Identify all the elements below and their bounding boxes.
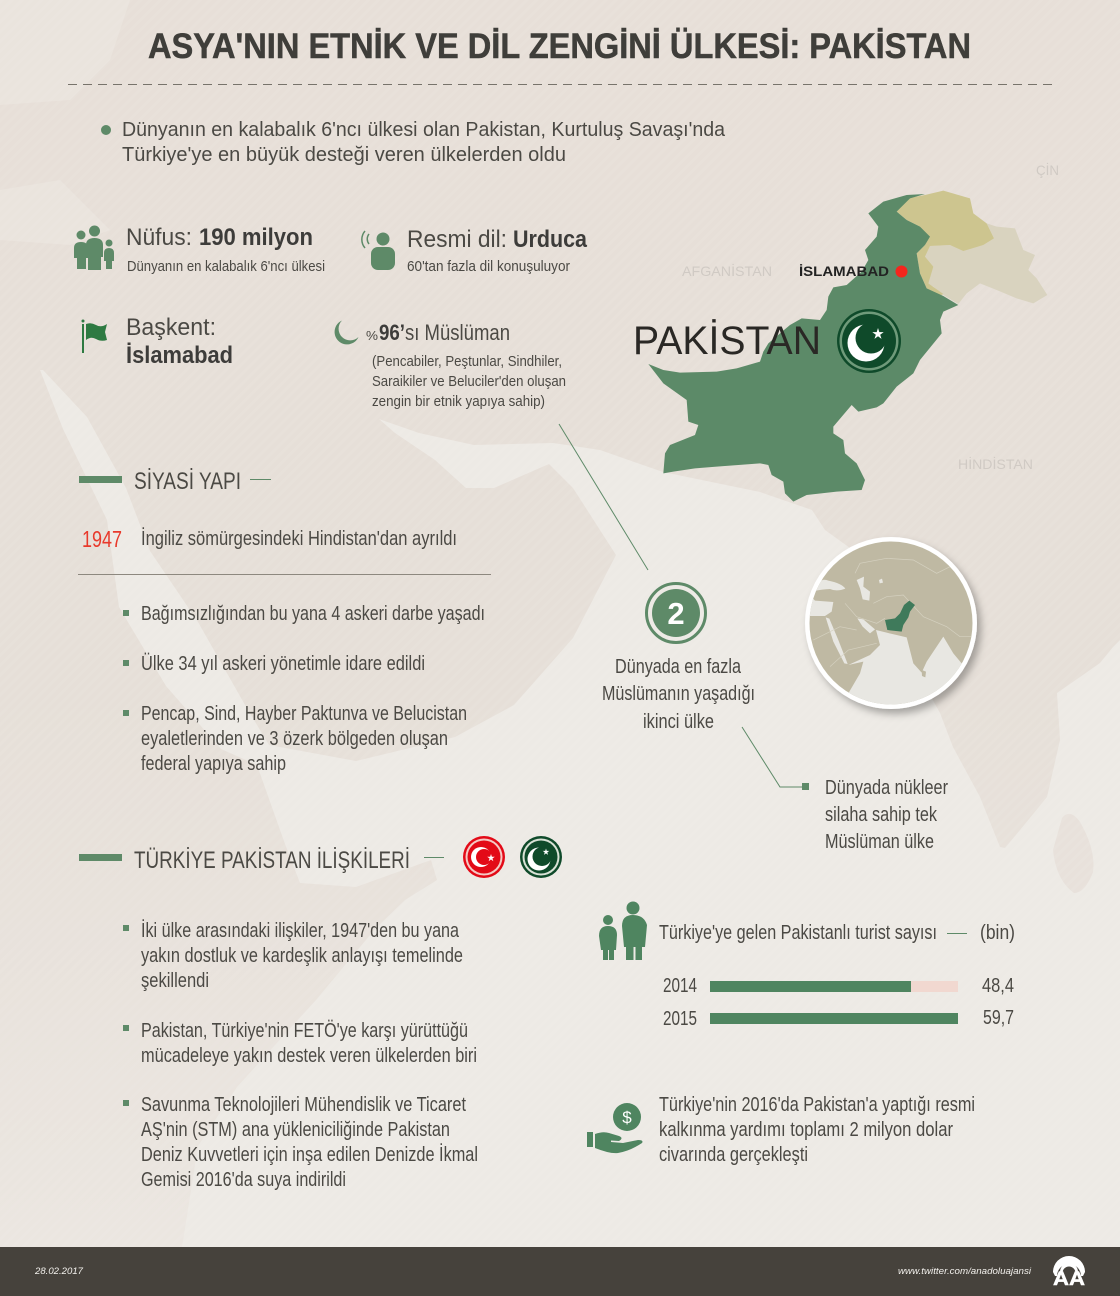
label: afganistan: AFGANİSTAN: [682, 262, 772, 279]
icon: turkish flag: [463, 836, 505, 878]
logo: anadolu agency: AA: [1053, 1269, 1085, 1290]
official language stat: 60'tan fazla dil konuşuluyor: [407, 258, 570, 275]
icon: aid hand and coin: $: [622, 1108, 632, 1127]
icon: pakistan flag badge: [837, 309, 901, 373]
title: ASYA'NIN ETNİK VE DİL ZENGİNİ ÜLKESİ: PAKİSTAN: [148, 27, 971, 66]
intro text: Dünyanın en kalabalık 6'ncı ülkesi olan Pakistan, Kurtuluş Savaşı'nda: [122, 119, 726, 141]
intro text: [101, 119, 726, 166]
badge: rank 2: 2: [667, 596, 685, 631]
arrow: connector to nuclear note: [742, 727, 809, 790]
heading: siyasi yapi: SİYASİ YAPI: [134, 468, 241, 495]
text: second largest muslim population: ikinci ülke: [643, 711, 714, 733]
text: nuclear power note: Dünyada nükleer: [825, 777, 948, 799]
muslim share stat: (Pencabiler, Peştunlar, Sindhiler,: [372, 353, 562, 370]
population stat: [126, 224, 325, 275]
row: 2015: 59,7: [983, 1007, 1014, 1029]
list: political structure: Pencap, Sind, Hayber Paktunva ve Belucistan: [141, 703, 467, 725]
list: relations: AŞ'nin (STM) ana yükleniciliğinde Pakistan: [141, 1119, 450, 1141]
icon: speaker: [362, 231, 395, 270]
row: 2015: [663, 1007, 1014, 1030]
list: relations: Deniz Kuvvetleri için inşa edilen Denizde İkmal: [141, 1143, 478, 1166]
population stat: 190 milyon: [199, 224, 313, 251]
muslim share stat: sı Müslüman: [405, 320, 510, 345]
1947 event: 1947: [82, 526, 122, 552]
logo: anadolu agency: [1053, 1256, 1085, 1290]
date: 28.02.2017: [34, 1266, 84, 1277]
capital stat: İslamabad: [126, 342, 233, 369]
country label: PAKİSTAN: [633, 318, 821, 363]
text: nuclear power note: [825, 777, 948, 853]
map: pakistan: [633, 191, 1047, 502]
muslim share stat: Saraikiler ve Beluciler'den oluşan: [372, 373, 566, 390]
list: political structure: eyaletlerinden ve 3 özerk bölgeden oluşan: [141, 728, 448, 750]
official language stat: [407, 226, 588, 275]
1947 event: İngiliz sömürgesindeki Hindistan'dan ayrıldı: [141, 527, 457, 550]
footer: [0, 1247, 1120, 1296]
text: second largest muslim population: Dünyada en fazla: [615, 656, 742, 678]
arrow: connector to rank badge: [559, 424, 648, 570]
1947 event: [82, 526, 457, 552]
label: cin: ÇİN: [1036, 161, 1059, 178]
list: relations: Savunma Teknolojileri Mühendislik ve Ticaret: [141, 1094, 466, 1116]
text: development aid: civarında gerçekleşti: [659, 1144, 808, 1166]
population stat: Nüfus:: [126, 224, 192, 251]
text: development aid: Türkiye'nin 2016'da Pakistan'a yaptığı resmi: [659, 1094, 975, 1116]
icon: pakistani flag: [520, 836, 562, 878]
text: development aid: [659, 1094, 975, 1166]
official language stat: Resmi dil:: [407, 226, 507, 253]
muslim share stat: 96’: [379, 320, 405, 345]
text: development aid: kalkınma yardımı toplamı 2 milyon dolar: [659, 1119, 953, 1141]
list: relations: İki ülke arasındaki ilişkiler, 1947'den bu yana: [141, 919, 460, 942]
list: relations: Pakistan, Türkiye'nin FETÖ'ye karşı yürüttüğü: [141, 1020, 468, 1042]
icon: population: [74, 226, 114, 270]
list: relations: mücadeleye yakın destek veren ülkelerden biri: [141, 1045, 477, 1067]
label: hindistan: HİNDİSTAN: [958, 455, 1033, 472]
text: second largest muslim population: Müslümanın yaşadığı: [602, 683, 755, 705]
text: nuclear power note: silaha sahip tek: [825, 804, 938, 826]
official language stat: Urduca: [513, 226, 588, 253]
list: relations: şekillendi: [141, 970, 209, 992]
heading: turkiye pakistan iliskileri: TÜRKİYE PAKİSTAN İLİŞKİLERİ: [134, 847, 410, 874]
population stat: Dünyanın en kalabalık 6'ncı ülkesi: [127, 258, 325, 275]
row: 2014: [663, 975, 1014, 997]
list: political structure: Ülke 34 yıl askeri yönetimle idare edildi: [141, 653, 425, 675]
row: 2014: 2014: [663, 975, 697, 997]
list: relations: Gemisi 2016'da suya indirildi: [141, 1169, 346, 1191]
chart: tourist arrivals: Türkiye'ye gelen Pakistanlı turist sayısı: [659, 922, 937, 944]
icon: tourists: [599, 902, 647, 960]
chart: tourist arrivals: (bin): [980, 922, 1015, 944]
list: political structure: [123, 603, 485, 775]
text: second largest muslim population: [602, 656, 755, 733]
chart: tourist arrivals: [659, 922, 1015, 1030]
badge: rank 2: [646, 584, 706, 642]
city: islamabad: İSLAMABAD: [799, 263, 889, 279]
list: political structure: Bağımsızlığından bu yana 4 askeri darbe yaşadı: [141, 603, 485, 625]
list: relations: [123, 919, 478, 1191]
icon: locator globe: [805, 537, 980, 717]
intro text: Türkiye'ye en büyük desteği veren ülkelerden oldu: [122, 144, 566, 166]
muslim share stat: [366, 320, 566, 410]
row: 2014: 48,4: [982, 975, 1014, 997]
row: 2015: 2015: [663, 1008, 697, 1030]
muslim share stat: zengin bir etnik yapıya sahip): [372, 393, 545, 410]
icon: crescent: [335, 320, 358, 344]
twitter url: www.twitter.com/anadoluajansi: [898, 1266, 1032, 1277]
capital stat: Başkent:: [126, 314, 216, 341]
list: political structure: federal yapıya sahip: [141, 753, 286, 775]
icon: flag: [82, 320, 107, 353]
capital stat: [126, 314, 233, 369]
list: relations: yakın dostluk ve kardeşlik anlayışı temelinde: [141, 945, 463, 967]
icon: aid hand and coin: [587, 1103, 642, 1153]
text: nuclear power note: Müslüman ülke: [825, 831, 934, 853]
muslim share stat: %: [366, 328, 378, 343]
